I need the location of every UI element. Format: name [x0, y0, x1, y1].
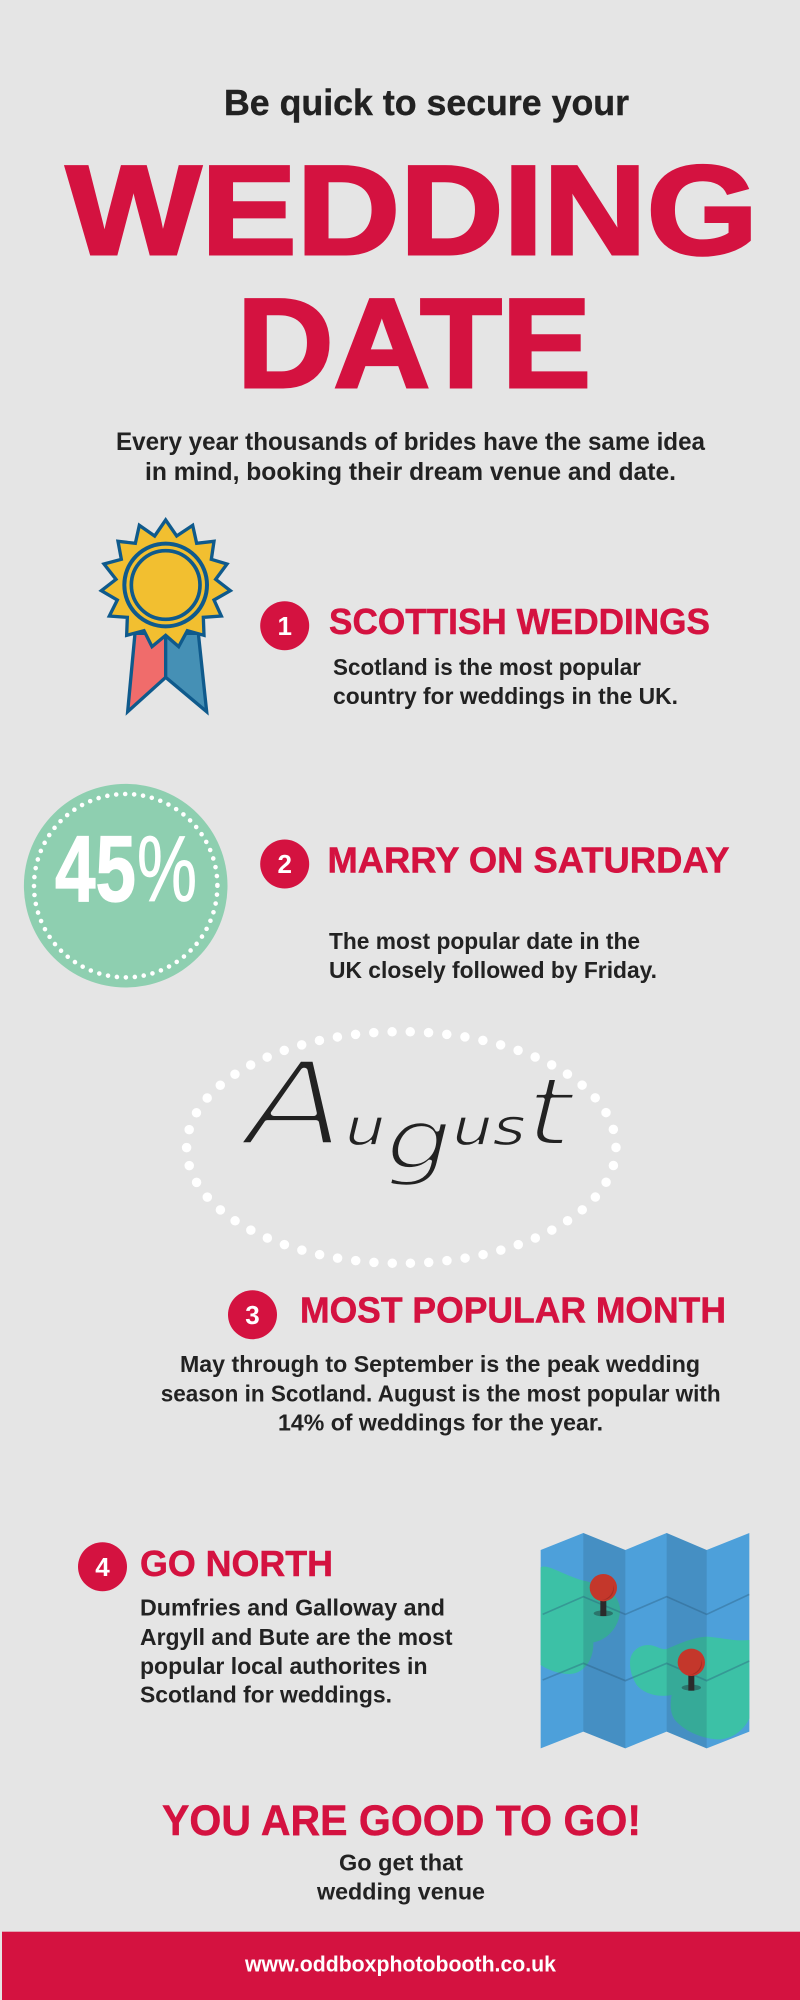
body text: [161, 1351, 721, 1436]
panel: step 2 marry on Saturday: [24, 784, 729, 988]
badge 1: [260, 601, 309, 650]
badge 2: 2: [277, 849, 292, 879]
tagline: Be quick to secure your: [224, 82, 629, 123]
icon: folded map with pins: [541, 1533, 749, 1748]
badge 2: [260, 840, 309, 888]
body text: country for weddings in the UK.: [333, 683, 678, 709]
stat circle: 45%: 45: [55, 816, 136, 921]
title: WEDDING DATE: DATE: [237, 272, 591, 414]
heading: GO NORTH: [140, 1543, 333, 1584]
badge 3: 3: [245, 1300, 260, 1330]
closing text: wedding venue: [316, 1878, 485, 1904]
dotted oval with August: g: [385, 1091, 453, 1190]
heading: MARRY ON SATURDAY: [328, 840, 730, 881]
dotted oval with August: t: [526, 1058, 577, 1168]
panel: step 4 go north: [78, 1533, 749, 1748]
intro text: in mind, booking their dream venue and date.: [145, 458, 676, 486]
panel: step 3 most popular month: [161, 1032, 726, 1436]
body text: season in Scotland. August is the most popular with: [161, 1381, 721, 1407]
dotted oval with August: us: [453, 1099, 526, 1158]
intro text: [116, 428, 706, 486]
body text: [140, 1595, 453, 1707]
badge 4: 4: [95, 1552, 110, 1582]
stat circle: 45%: %: [137, 816, 197, 921]
badge 3: [228, 1290, 277, 1339]
stat circle: 45%: [24, 784, 228, 988]
footer bar: [2, 1932, 800, 2000]
heading: MOST POPULAR MONTH: [300, 1290, 726, 1331]
body text: popular local authorites in: [140, 1653, 428, 1679]
body text: Scotland for weddings.: [140, 1681, 392, 1707]
panel: header: [66, 82, 758, 486]
panel: step 1 Scottish weddings: [101, 520, 710, 712]
body text: UK closely followed by Friday.: [329, 957, 657, 983]
body text: 14% of weddings for the year.: [278, 1410, 603, 1436]
intro text: Every year thousands of brides have the same idea: [116, 428, 706, 456]
badge 4: [78, 1542, 127, 1591]
body text: The most popular date in the: [329, 928, 640, 954]
badge 1: 1: [277, 611, 292, 641]
pin 1: [590, 1574, 617, 1616]
body text: Scotland is the most popular: [333, 654, 641, 680]
dotted oval with August: [187, 1032, 616, 1263]
body text: [333, 654, 678, 709]
body text: Argyll and Bute are the most: [140, 1624, 453, 1650]
title: WEDDING DATE: WEDDING: [66, 139, 758, 281]
panel: closing message: [162, 1797, 641, 1904]
closing text: [316, 1850, 485, 1904]
body text: [329, 928, 657, 983]
body text: May through to September is the peak wedding: [180, 1351, 700, 1377]
footer bar: www.oddboxphotobooth.co.uk: [244, 1952, 557, 1977]
pin 2: [678, 1649, 705, 1691]
closing text: Go get that: [339, 1850, 463, 1876]
heading: SCOTTISH WEDDINGS: [329, 601, 710, 642]
icon: award rosette: [101, 520, 230, 712]
body text: Dumfries and Galloway and: [140, 1595, 445, 1621]
dotted oval with August: A u: [245, 1035, 378, 1173]
closing heading: YOU ARE GOOD TO GO!: [162, 1797, 641, 1845]
title: WEDDING DATE: [66, 139, 758, 414]
